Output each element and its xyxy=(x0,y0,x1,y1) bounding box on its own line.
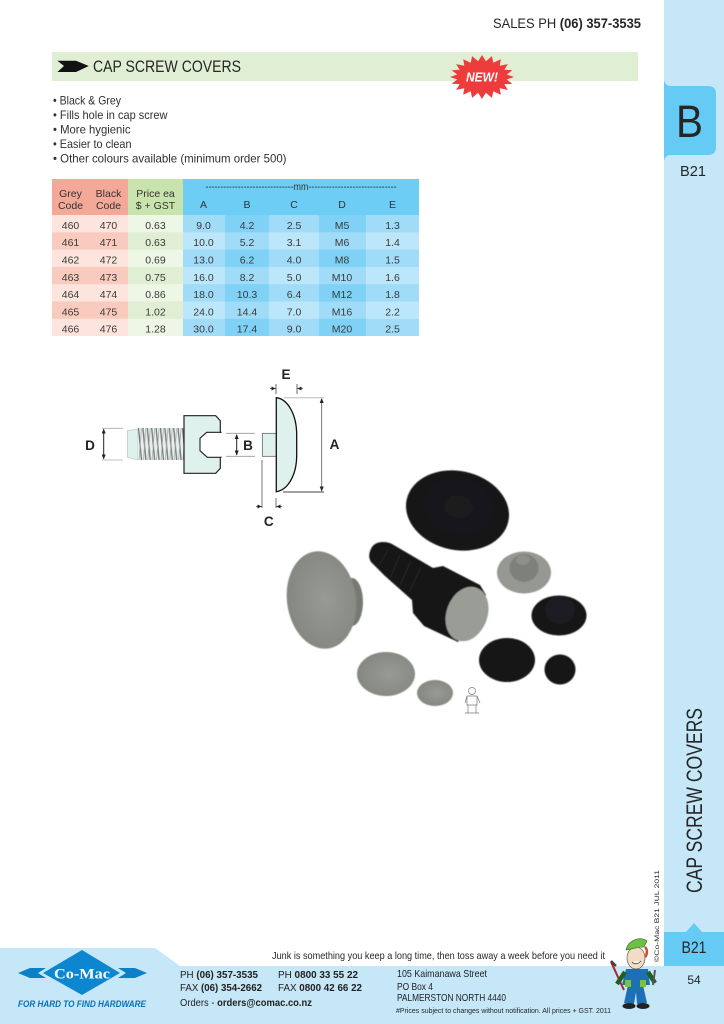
row 463: 8.2 xyxy=(240,272,254,284)
bottom sidebar code xyxy=(664,923,724,966)
black disc xyxy=(479,638,535,682)
row 462: 6.2 xyxy=(240,254,254,266)
contact details: PH (06) 357-3535 xyxy=(180,969,258,981)
table header: Code xyxy=(96,200,121,212)
feature bullet list: • Other colours available (minimum order 500) xyxy=(53,152,286,166)
row 463: 16.0 xyxy=(193,272,214,284)
vertical section title: CAP SCREW COVERS xyxy=(682,708,707,893)
row 466: 1.28 xyxy=(145,324,166,336)
row 466: 17.4 xyxy=(237,324,257,336)
table header: C xyxy=(290,199,298,211)
price disclaimer: #Prices subject to changes without notification. All prices + GST. 2011 xyxy=(396,1006,611,1015)
dimension E xyxy=(270,367,303,394)
row 461: 10.0 xyxy=(193,237,214,249)
row 460: 4.2 xyxy=(240,220,254,232)
large black cover xyxy=(398,461,517,560)
new starburst badge xyxy=(450,55,514,99)
address: PALMERSTON NORTH 4440 xyxy=(397,992,506,1004)
table header: D xyxy=(338,199,346,211)
row 463: 473 xyxy=(100,272,117,284)
row 465: 2.2 xyxy=(385,306,400,318)
black screw with grey cap xyxy=(369,542,496,647)
contact details: Orders - orders@comac.co.nz xyxy=(180,997,312,1009)
contact details: FAX 0800 42 66 22 xyxy=(278,982,362,994)
table header xyxy=(52,179,419,215)
row 460: 9.0 xyxy=(196,220,211,232)
row 464: M12 xyxy=(332,289,352,301)
small grey disc xyxy=(417,680,453,706)
table header: $ + GST xyxy=(136,200,176,212)
row 462: M8 xyxy=(335,254,349,266)
product photo xyxy=(281,461,586,706)
table header: E xyxy=(389,199,396,211)
row 460: 1.3 xyxy=(385,220,400,232)
Co-Mac logo: Co-Mac xyxy=(54,966,110,982)
row 465: 24.0 xyxy=(193,306,214,318)
sidebar tab B xyxy=(664,80,716,161)
small black disc xyxy=(544,654,576,684)
table header: Code xyxy=(58,200,83,212)
row 466: M20 xyxy=(332,324,352,336)
sidebar code: B21 xyxy=(680,164,706,180)
row 462: 462 xyxy=(62,254,79,266)
dimension C: C xyxy=(264,514,274,529)
row 463: 1.6 xyxy=(385,272,400,284)
row 464: 6.4 xyxy=(287,289,301,301)
row 463: M10 xyxy=(332,272,352,284)
dimension B xyxy=(226,433,255,456)
copyright vertical note: ©Co-Mac B21 JUL 2011 xyxy=(654,869,661,962)
feature bullet list: • Easier to clean xyxy=(53,137,132,151)
contact details xyxy=(180,969,362,1009)
row 461: 1.4 xyxy=(385,237,400,249)
table header: A xyxy=(200,199,207,211)
row 465: 7.0 xyxy=(287,306,301,318)
dimension A: A xyxy=(330,437,340,452)
row 466: 2.5 xyxy=(385,324,400,336)
Co-Mac logo: FOR HARD TO FIND HARDWARE xyxy=(18,999,147,1010)
dimension D: D xyxy=(85,438,95,453)
small sketch figure xyxy=(465,688,480,713)
feature bullet list: • Fills hole in cap screw xyxy=(53,108,168,122)
row 460 xyxy=(62,220,400,232)
feature bullet list xyxy=(53,94,286,166)
row 465: M16 xyxy=(332,306,352,318)
table header: Black xyxy=(96,188,122,200)
row 462 xyxy=(62,254,400,266)
dimension D xyxy=(85,428,123,460)
junk quote: Junk is something you keep a long time, then toss away a week before you need it xyxy=(272,950,605,962)
row 466: 466 xyxy=(62,324,79,336)
row 461: M6 xyxy=(335,237,349,249)
row 465 xyxy=(62,306,400,318)
row 463 xyxy=(62,272,400,284)
row 465: 465 xyxy=(62,306,79,318)
row 460: 460 xyxy=(62,220,79,232)
large grey cover xyxy=(281,547,363,653)
row 466 xyxy=(62,324,400,336)
new starburst badge: NEW! xyxy=(466,70,498,84)
table row backgrounds xyxy=(52,215,419,336)
row 461 xyxy=(62,237,400,249)
row 461: 3.1 xyxy=(287,237,301,249)
row 461: 5.2 xyxy=(240,237,254,249)
row 462: 4.0 xyxy=(287,254,301,266)
row 465: 475 xyxy=(100,306,117,318)
row 462: 0.69 xyxy=(145,254,166,266)
dimension A xyxy=(283,398,340,492)
pricing and dimensions table xyxy=(52,179,419,336)
grey disc xyxy=(357,652,415,696)
contact details: FAX (06) 354-2662 xyxy=(180,982,262,994)
row 463: 0.75 xyxy=(145,272,166,284)
row 464: 1.8 xyxy=(385,289,400,301)
row 463: 5.0 xyxy=(287,272,301,284)
title bar xyxy=(52,52,638,81)
mascot xyxy=(611,939,655,1009)
screw drawing xyxy=(127,416,221,473)
cover drawing xyxy=(262,398,297,492)
right sidebar strip xyxy=(664,0,724,1024)
row 460: 2.5 xyxy=(287,220,301,232)
feature bullet list: • Black & Grey xyxy=(53,94,121,108)
feature bullet list: • More hygienic xyxy=(53,122,130,136)
contact details: PH 0800 33 55 22 xyxy=(278,969,358,981)
table header: Price ea xyxy=(136,188,175,200)
row 460: M5 xyxy=(335,220,349,232)
Co-Mac logo xyxy=(18,950,147,1010)
sales phone number: SALES PH (06) 357-3535 xyxy=(493,15,641,31)
sidebar tab B: B xyxy=(676,96,703,147)
row 460: 0.63 xyxy=(145,220,166,232)
row 466: 9.0 xyxy=(287,324,301,336)
row 460: 470 xyxy=(100,220,117,232)
row 463: 463 xyxy=(62,272,79,284)
title: CAP SCREW COVERS xyxy=(93,57,241,76)
icon: title arrow xyxy=(57,61,89,72)
row 465: 14.4 xyxy=(237,306,257,318)
address xyxy=(397,968,506,1004)
row 464: 18.0 xyxy=(193,289,214,301)
footer band xyxy=(0,948,724,1024)
page number: 54 xyxy=(687,973,701,987)
table header: B xyxy=(243,199,251,211)
row 461: 461 xyxy=(62,237,79,249)
dimension diagram xyxy=(85,367,340,529)
dimension C xyxy=(256,460,282,529)
row 464: 0.86 xyxy=(145,289,166,301)
dimension B: B xyxy=(243,438,253,453)
row 465: 1.02 xyxy=(145,306,166,318)
table header: ------------------------------mm------------------------------ xyxy=(206,181,397,193)
grey cover with stem xyxy=(497,552,551,594)
row 466: 476 xyxy=(100,324,117,336)
row 461: 0.63 xyxy=(145,237,166,249)
address: PO Box 4 xyxy=(397,981,433,993)
row 464: 474 xyxy=(100,289,117,301)
row 462: 472 xyxy=(100,254,117,266)
row 466: 30.0 xyxy=(193,324,214,336)
bottom sidebar code: B21 xyxy=(682,938,706,957)
table header: Grey xyxy=(59,188,83,200)
row 461: 471 xyxy=(100,237,117,249)
row 464 xyxy=(62,289,400,301)
address: 105 Kaimanawa Street xyxy=(397,968,487,980)
row 464: 10.3 xyxy=(237,289,257,301)
row 462: 13.0 xyxy=(193,254,214,266)
row 462: 1.5 xyxy=(385,254,400,266)
black cover with stem xyxy=(532,596,586,636)
row 464: 464 xyxy=(62,289,79,301)
dimension E: E xyxy=(281,367,291,382)
